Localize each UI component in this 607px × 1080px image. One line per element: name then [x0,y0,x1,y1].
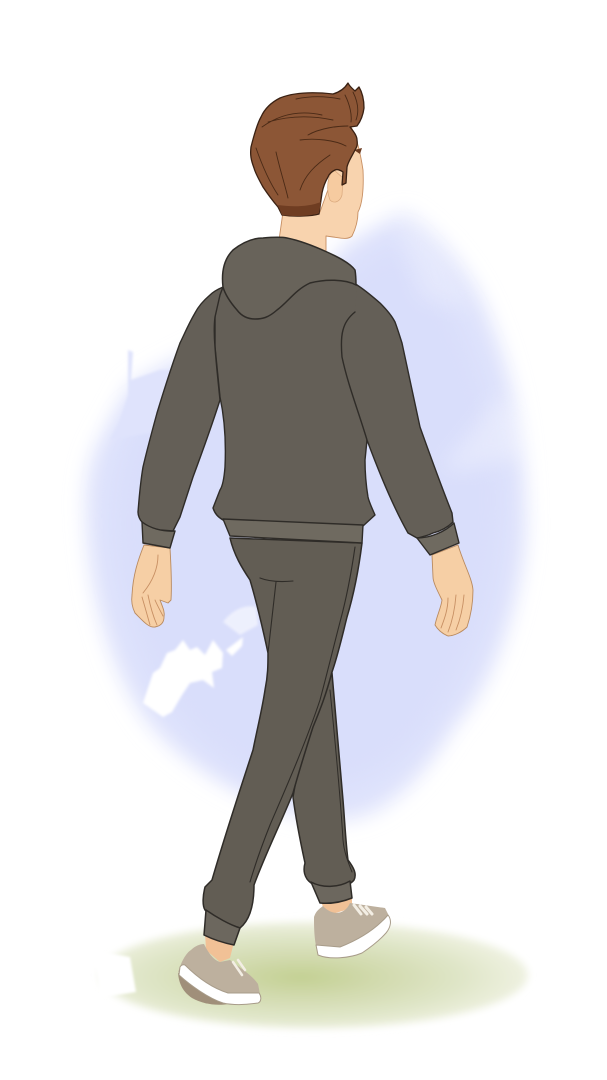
hoodie body [213,250,380,543]
hood [222,237,356,319]
hair strands [256,92,358,198]
white brush marks in the wash [143,205,530,717]
neck and face [279,125,363,252]
right sleeve [341,285,459,555]
hair base shade [278,202,321,216]
eyebrow [354,148,362,154]
blue watercolour wash [86,212,526,820]
front trouser cuff [204,910,240,945]
back foot: shoe and ankle [314,894,390,958]
left hand [132,545,171,627]
ear [328,170,343,202]
right hand [432,545,473,636]
front foot: shoe and ankle [178,932,261,1005]
back trouser cuff [311,881,352,903]
trouser seams [260,578,293,653]
crisp torn edge, upper left [110,350,180,440]
left cuff [142,522,175,548]
trouser side stripe [250,547,355,882]
right sleeve outline [341,285,453,538]
front leg of trousers [203,538,362,945]
hair [251,83,364,216]
ground: green shadow patch [92,922,528,1028]
white patch on ground [92,950,136,998]
right cuff [417,523,459,555]
figure [132,83,473,1005]
back leg seam [330,690,352,872]
left sleeve [138,287,223,548]
back leg of trousers [293,673,355,903]
hoodie waistband [223,519,363,543]
